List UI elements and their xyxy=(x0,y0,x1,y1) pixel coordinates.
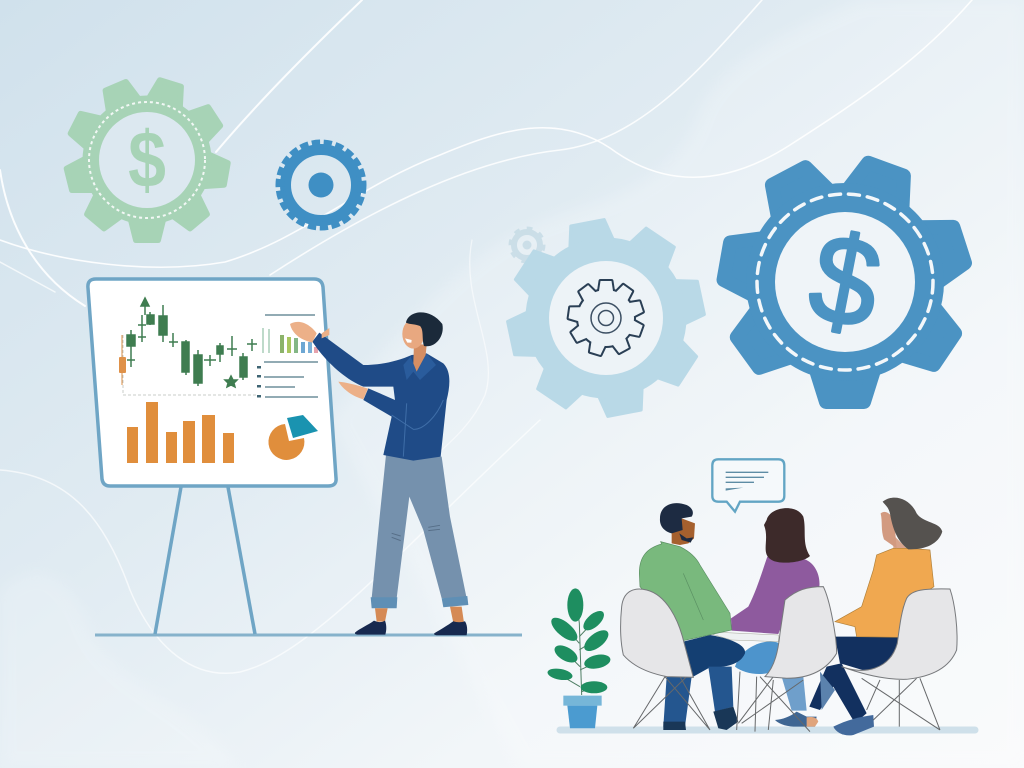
icon: outline cog xyxy=(568,281,643,355)
hands xyxy=(290,322,368,399)
woman centre xyxy=(731,508,819,727)
woman right xyxy=(809,498,942,735)
trousers xyxy=(371,455,468,608)
chair left xyxy=(621,589,710,730)
speech bubble xyxy=(712,459,784,512)
icon: large blue dollar gear xyxy=(722,159,968,402)
icon: green dollar gear: $ xyxy=(128,115,166,204)
chair centre xyxy=(737,587,837,732)
candlestick chart xyxy=(119,298,257,395)
presenter figure xyxy=(290,312,468,635)
icon: faint small gear xyxy=(511,229,543,261)
easel legs xyxy=(155,487,255,634)
dollar sign: $ xyxy=(799,206,891,356)
jacket xyxy=(312,333,449,461)
chair right xyxy=(842,589,957,730)
presentation board xyxy=(88,279,336,486)
head xyxy=(402,312,443,372)
table xyxy=(703,632,782,674)
plant in pot xyxy=(547,588,612,728)
feet xyxy=(355,607,467,635)
small bar chart and list xyxy=(257,315,318,398)
pie chart xyxy=(268,415,318,460)
man xyxy=(639,503,745,730)
icon: small blue gear xyxy=(280,144,362,226)
icon: light blue gear with outline cog xyxy=(507,219,705,417)
ground line: team xyxy=(560,726,975,734)
team seated on chairs xyxy=(621,498,957,735)
icon: green dollar gear xyxy=(66,79,229,240)
orange bar chart xyxy=(127,402,234,463)
ground line: presenter xyxy=(95,634,522,636)
